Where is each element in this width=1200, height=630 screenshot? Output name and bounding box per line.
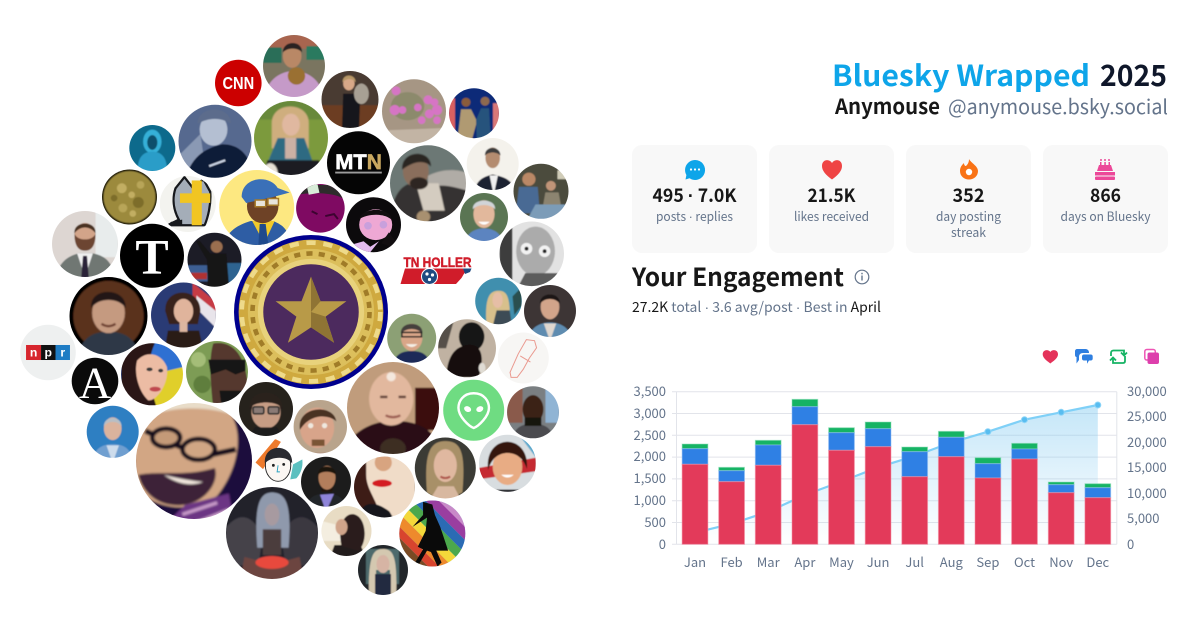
avatar: New York Times T: T — [135, 230, 169, 285]
avatar: smiling man with black ring — [70, 277, 148, 355]
month labels: Jan — [684, 552, 706, 571]
avatar: smiling older man in blue check shirt — [455, 188, 513, 246]
bar: Jan — [682, 444, 708, 544]
bar: Dec — [1085, 484, 1111, 544]
grid lines — [672, 392, 1117, 544]
avatar: mitre with yellow cross — [160, 176, 216, 232]
avatar: NPR logo: n — [30, 345, 37, 359]
avatar: lips and pale face — [354, 456, 415, 518]
avatar: cartoon face with orange and teal — [256, 439, 302, 482]
avatar: platinum blonde woman — [358, 545, 408, 595]
icon: birthday cake — [1095, 159, 1115, 180]
month labels: Oct — [1014, 552, 1035, 571]
avatar: man on stage — [188, 232, 242, 287]
left axis labels: 1,500 — [634, 468, 666, 487]
month labels: Nov — [1049, 552, 1073, 571]
avatar: NPR logo — [20, 325, 76, 380]
right axis labels: 25,000 — [1127, 406, 1167, 425]
left axis labels: 3,500 — [634, 381, 666, 400]
avatar: TN Holler logo: TN HOLLER — [404, 254, 472, 270]
right axis labels: 20,000 — [1127, 432, 1167, 451]
avatar: black poodle — [438, 319, 496, 378]
bar: Oct — [1012, 443, 1037, 544]
panel: day posting streak: 352 — [952, 182, 984, 208]
month labels: May — [829, 552, 854, 571]
panel: day posting streak: streak — [951, 222, 986, 241]
stacked bars — [682, 399, 1111, 544]
panel: days on Bluesky — [1043, 145, 1168, 253]
avatar: alien icon on green — [443, 380, 504, 441]
month labels: Jul — [905, 552, 924, 571]
avatar: man in cap, blue duotone — [178, 104, 252, 178]
bar: Sep — [975, 458, 1001, 544]
panel: posts and replies — [632, 145, 757, 253]
avatar: golden coin — [102, 170, 157, 224]
avatar: purple cartoon with hat — [291, 179, 350, 237]
icon: reposts arrows — [1110, 350, 1127, 363]
icon: heart — [822, 160, 842, 180]
title: Bluesky Wrapped — [832, 53, 1090, 95]
panel: likes received: likes received — [794, 206, 869, 225]
avatar: woman with Ukrainian flag — [121, 343, 183, 406]
avatar: large man with glasses — [136, 403, 252, 519]
bar: Nov — [1048, 482, 1074, 544]
avatar: MTN logo: MT — [335, 150, 367, 174]
avatar: The Atlantic A: A — [79, 357, 111, 407]
avatar: blue hooded figure — [129, 125, 176, 171]
panel: likes received: 21.5K — [808, 182, 856, 208]
avatar: woman holding dog — [322, 71, 378, 128]
bar: Apr — [792, 399, 818, 544]
avatar: CNN logo — [215, 60, 262, 106]
avatar: pink flowering cactus — [382, 79, 446, 144]
avatar cloud — [15, 29, 581, 600]
right axis labels: 5,000 — [1127, 508, 1159, 527]
bar: Aug — [938, 431, 964, 544]
right axis labels: 15,000 — [1127, 457, 1167, 476]
month labels: Mar — [757, 552, 781, 571]
avatar: man with goatee — [294, 400, 347, 454]
month labels: Apr — [794, 552, 816, 571]
panel: day posting streak: day posting — [936, 206, 1001, 225]
bar: Mar — [755, 440, 781, 544]
avatar: bug-eyed grey face — [493, 215, 570, 293]
avatar: NPR logo: p — [45, 345, 52, 359]
avatar: woman with US flag — [151, 282, 216, 348]
avatar: gold star medal — [234, 235, 388, 389]
avatar: silhouette on pride flag — [399, 500, 466, 566]
avatar: two men in denim — [508, 158, 574, 224]
avatar: blonde woman on teal — [471, 273, 526, 329]
avatar: MTN logo — [321, 125, 396, 201]
avatar: The Atlantic A — [72, 358, 118, 404]
avatar: NPR logo: r — [60, 345, 65, 359]
left axis labels: 2,500 — [634, 425, 666, 444]
icon: quotes squares — [1145, 350, 1159, 364]
icon: speech bubble — [685, 160, 705, 180]
avatar: Black man in hoodie — [507, 386, 559, 438]
avatar: man in suit, purple shirt — [301, 456, 351, 507]
left axis labels: 0 — [659, 534, 666, 553]
right axis labels: 10,000 — [1127, 483, 1167, 502]
right axis labels: 0 — [1127, 534, 1134, 553]
month labels: Jun — [867, 552, 889, 571]
avatar: man with sunglasses — [186, 341, 248, 403]
month labels — [684, 552, 1110, 571]
cumulative line — [695, 405, 1098, 533]
panel: days on Bluesky: days on Bluesky — [1060, 206, 1151, 225]
right axis labels — [1127, 381, 1167, 553]
month labels: Sep — [976, 552, 999, 571]
avatar: red line sketch — [498, 332, 548, 384]
panel: days on Bluesky: 866 — [1090, 182, 1121, 208]
chart legend icons — [1043, 349, 1159, 364]
profile name and handle — [834, 91, 1168, 121]
right axis labels: 30,000 — [1127, 381, 1167, 400]
title: 2025 — [1100, 53, 1167, 95]
avatar: bearded man in grey suit — [52, 211, 118, 277]
left axis labels — [634, 381, 666, 553]
avatar: man on blue background — [86, 406, 139, 458]
panel: posts and replies: 495 · 7.0K — [652, 182, 737, 208]
profile name and handle: @anymouse.bsky.social — [948, 91, 1168, 120]
avatar: anime girl with pink skin — [340, 192, 406, 258]
icon: flame — [960, 159, 978, 180]
avatar: blonde woman on grass — [254, 101, 328, 175]
avatar: man with glasses and curly hair — [239, 382, 293, 436]
month labels: Aug — [940, 552, 963, 571]
profile name and handle: Anymouse — [834, 91, 940, 121]
avatar: grinning man with glasses — [387, 314, 436, 363]
bar: Feb — [719, 467, 744, 544]
avatar: woman with short hair, UK flag — [479, 434, 536, 492]
cumulative points — [985, 402, 1101, 435]
bar: Jun — [865, 422, 891, 544]
engagement summary: 27.2K total · 3.6 avg/post · Best in April — [632, 297, 881, 317]
heading: your engagement: Your Engagement — [631, 258, 844, 294]
icon: likes heart — [1043, 350, 1058, 364]
avatar: New York Times T — [120, 224, 184, 288]
avatar: pale-haired woman with red book — [226, 487, 318, 579]
avatar: bald man in dark shirt — [347, 362, 439, 454]
icon: info — [855, 270, 869, 284]
left axis labels: 1,000 — [634, 490, 666, 509]
left axis labels: 500 — [644, 512, 666, 531]
avatar: MTN logo: N — [367, 150, 382, 174]
avatar: young man in blue jacket — [519, 280, 581, 342]
avatar: dark-haired man with cat — [382, 138, 474, 229]
avatar: man in dark suit on white — [462, 133, 524, 195]
avatar: TN Holler logo — [400, 254, 472, 284]
month labels: Feb — [720, 552, 743, 571]
panel: posts and replies: posts · replies — [656, 206, 733, 225]
cumulative area — [695, 405, 1098, 544]
avatar: woman with long hair — [414, 438, 476, 498]
bar: May — [829, 428, 854, 544]
chart: monthly engagement — [634, 381, 1167, 571]
left axis labels: 2,000 — [634, 446, 666, 465]
left axis labels: 3,000 — [634, 403, 666, 422]
avatar: woman with dark hair and glasses — [322, 506, 372, 556]
avatar: cartoon man in blue cap on yellow — [219, 170, 294, 245]
panel: likes received — [769, 145, 894, 253]
avatar: two people shaking hands with flags — [444, 83, 504, 143]
month labels: Dec — [1086, 552, 1110, 571]
avatar: CNN logo: CNN — [222, 73, 254, 93]
bar: Jul — [902, 447, 928, 544]
icon: replies bubbles — [1075, 349, 1093, 364]
avatar: man with coconut — [263, 35, 325, 97]
panel: day posting streak — [906, 145, 1031, 253]
